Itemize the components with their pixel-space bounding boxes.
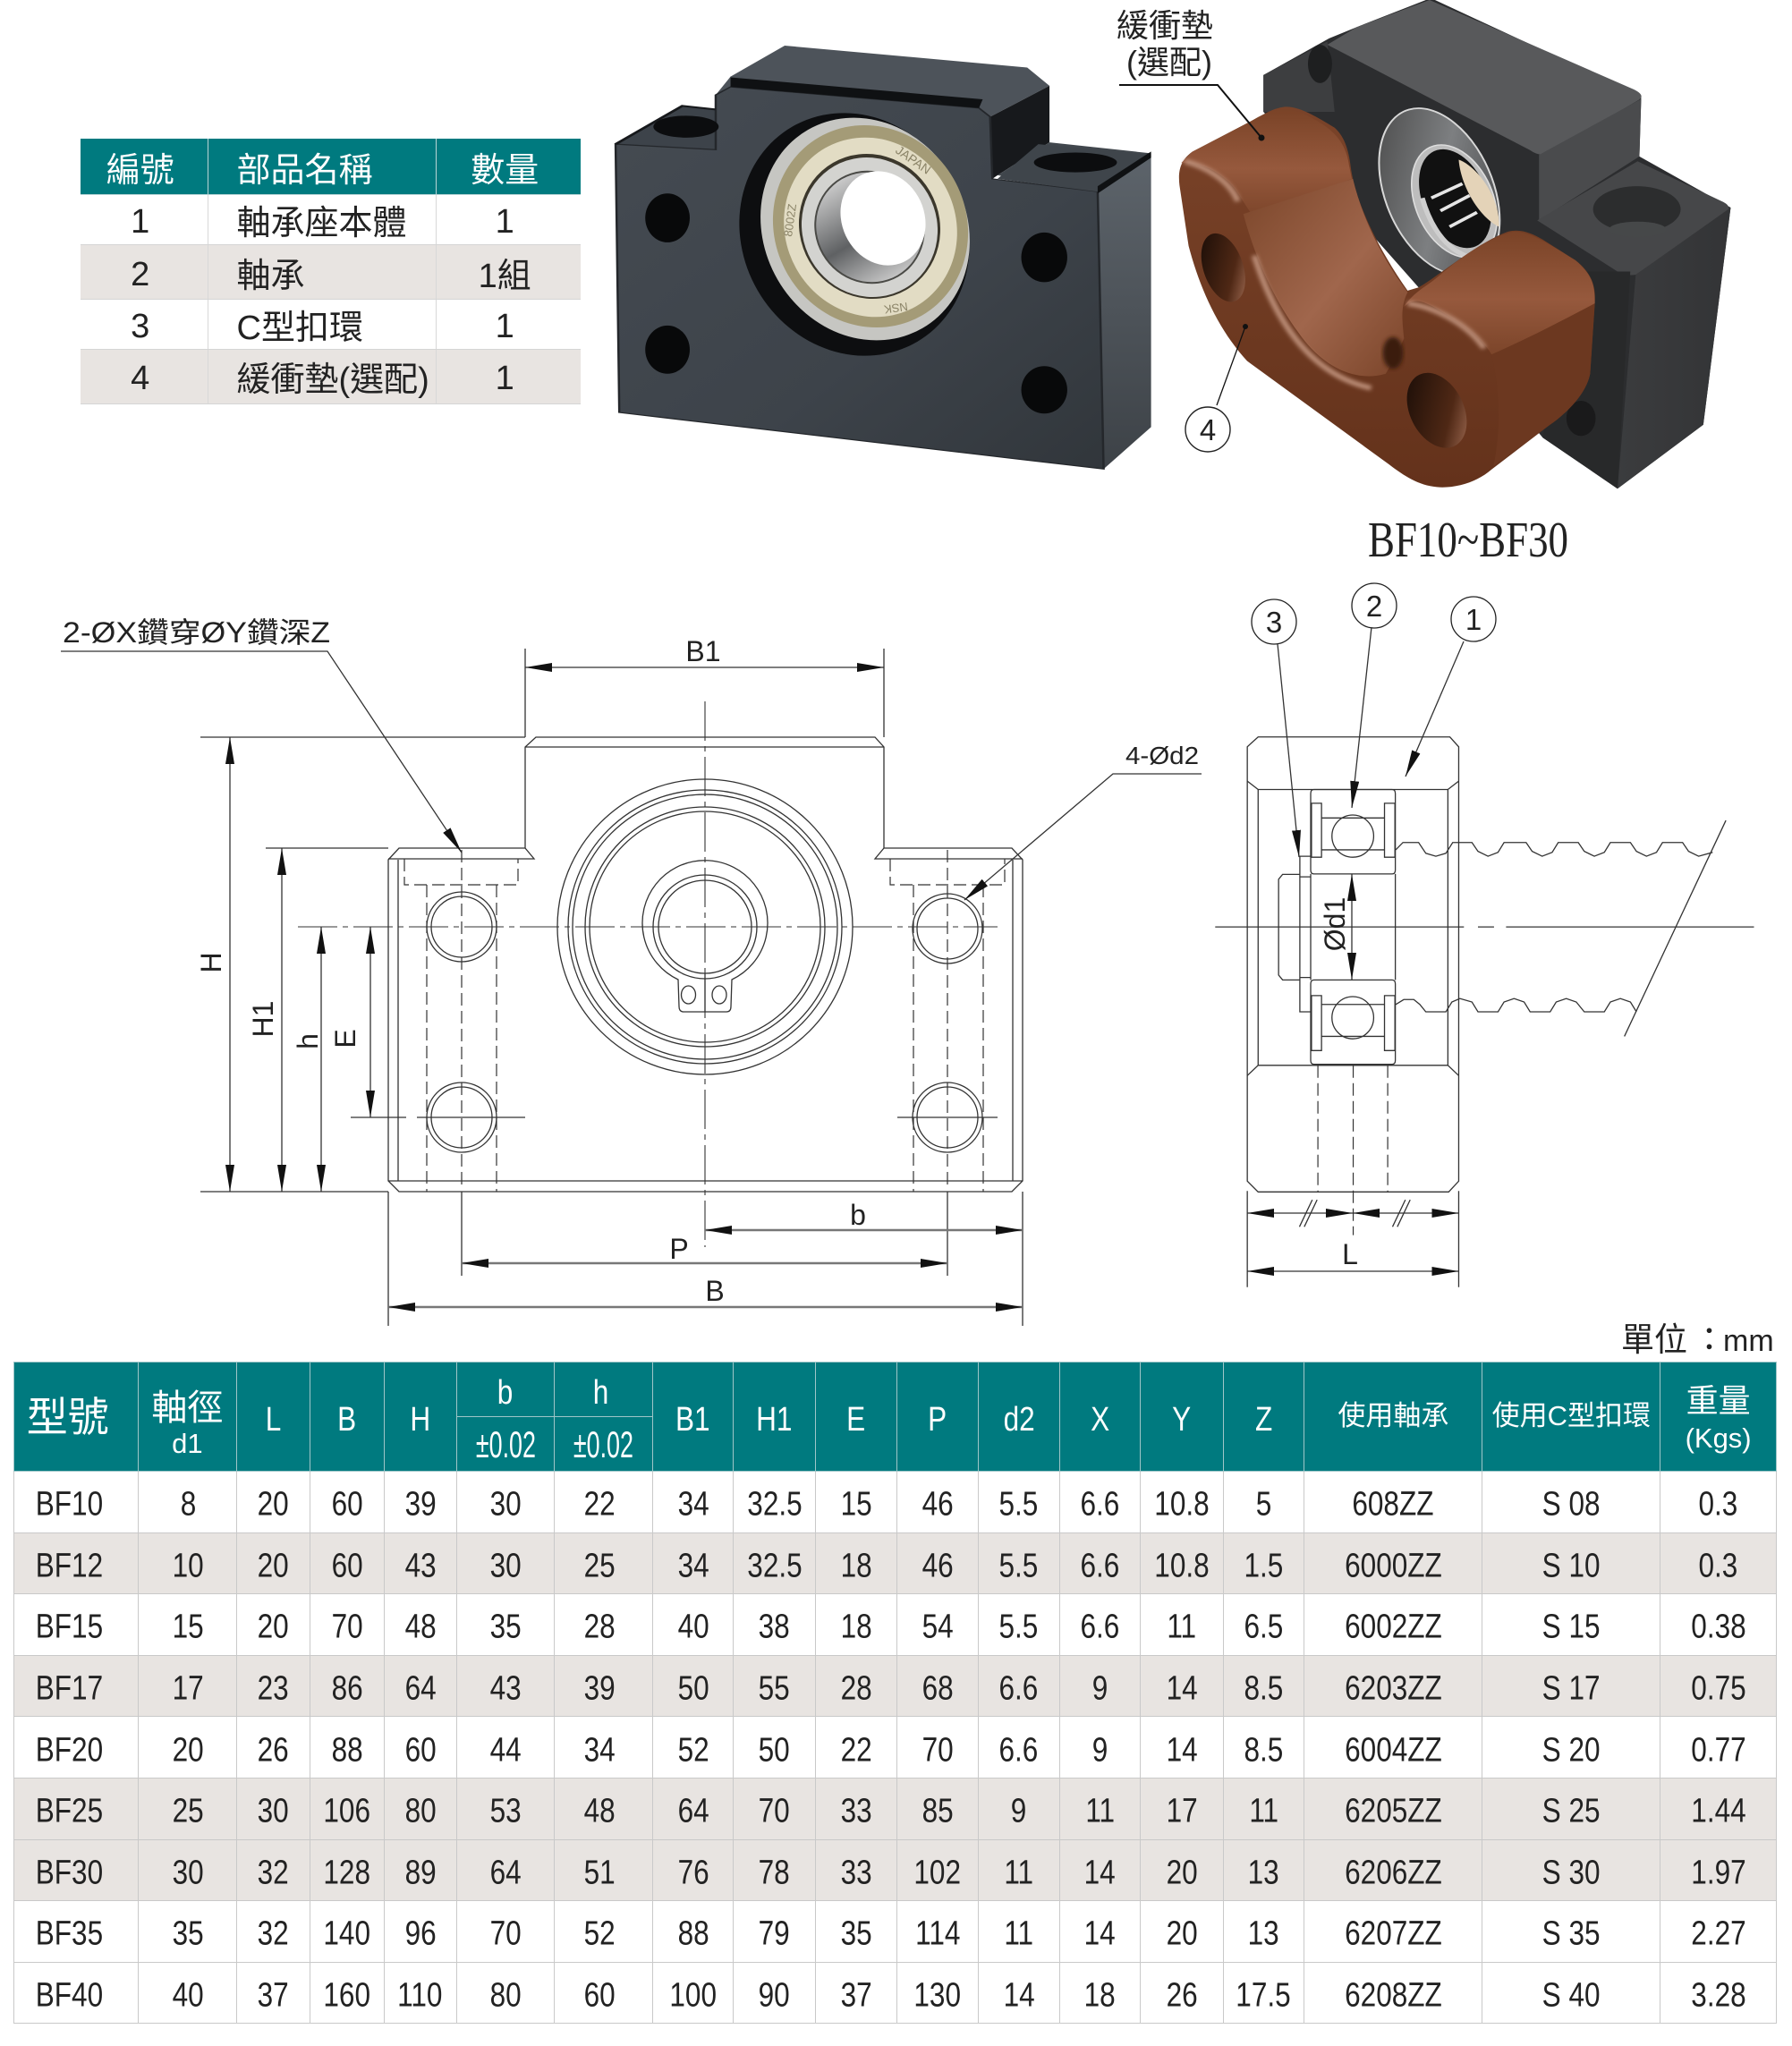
specification table: 34 [677,1486,709,1524]
specification table: E [846,1401,865,1439]
specification table: 54 [921,1609,953,1646]
parts list table: C型扣環 [236,310,363,347]
bearing [695,71,1014,398]
unit note: mm [1723,1324,1774,1358]
specification table: 30 [173,1854,204,1891]
specification table: 39 [404,1486,436,1524]
housing body [1263,0,1730,488]
specification table: 20 [258,1609,289,1646]
specification table: 51 [584,1854,616,1891]
specification table: 96 [404,1915,436,1953]
specification table: 40 [173,1977,204,2015]
technical drawing: side view [1215,737,1754,1287]
specification table: 10 [173,1547,204,1584]
specification table: 70 [331,1609,362,1646]
specification table: 0.75 [1691,1670,1745,1708]
specification table: 130 [914,1977,961,2015]
specification table: 14 [1003,1977,1034,2015]
specification table: 9 [1092,1731,1108,1769]
specification table: 使用軸承 [1338,1400,1448,1431]
specification table: 8.5 [1244,1731,1283,1769]
specification table: 20 [258,1547,289,1584]
leader label: counterbore holes: 2-ØX鑽穿ØY鑽深Z [63,616,330,649]
specification table: 106 [324,1793,370,1830]
specification table: Z [1255,1401,1272,1439]
specification table: (Kgs) [1686,1422,1752,1454]
specification table: 78 [759,1854,790,1891]
specification table: 6.6 [1081,1486,1119,1524]
specification table: 6002ZZ [1345,1609,1442,1646]
specification table: 35 [840,1915,871,1953]
specification table: 6.6 [999,1670,1039,1708]
specification table: 37 [258,1977,289,2015]
specification table: BF40 [36,1977,103,2015]
balloon: part 1: 1 [1465,603,1482,636]
specification table: 64 [677,1793,709,1830]
dimension lines: front view: P [669,1233,689,1265]
photo: housing with brown cushion pad [1179,0,1730,488]
specification table: BF15 [36,1609,103,1646]
leader label: mounting holes: 4-Ød2 [1125,742,1199,769]
specification table: 6004ZZ [1345,1731,1442,1769]
parts list table: 軸承座本體 [236,205,407,242]
specification table: 32.5 [747,1486,802,1524]
specification table: 0.77 [1691,1731,1745,1769]
parts list table: 部品名稱 [236,152,373,190]
specification table: 52 [584,1915,616,1953]
mounting holes [427,892,982,1152]
technical drawing: front view [298,701,1023,1247]
specification table: 3.28 [1691,1977,1745,2015]
specification table: 33 [840,1854,871,1891]
specification table: 30 [489,1486,522,1524]
specification table: 64 [404,1670,436,1708]
specification table: 0.3 [1699,1486,1738,1524]
specification table: 6.6 [1081,1547,1119,1584]
specification table: 2.27 [1691,1915,1745,1953]
specification table: H1 [756,1401,793,1439]
specification table: 8.5 [1244,1670,1283,1708]
specification table: 60 [331,1547,362,1584]
specification table: 8 [181,1486,196,1524]
specification table: 5.5 [999,1547,1039,1584]
specification table: 28 [584,1609,616,1646]
specification table: 40 [677,1609,709,1646]
dimension lines: side view [1247,874,1458,1271]
specification table: 11 [1085,1793,1115,1830]
parts list table: 1 [496,360,514,397]
specification table: 55 [759,1670,790,1708]
balloon: part 2: 2 [1366,590,1382,623]
leader label: counterbore holes [61,616,462,853]
specification table: 15 [173,1609,204,1646]
callout: part number 4: 4 [1200,413,1216,446]
specification table: 608ZZ [1353,1486,1434,1524]
specification table: 17.5 [1236,1977,1291,2015]
specification table: 11 [1004,1854,1033,1891]
specification table: S 25 [1542,1793,1601,1830]
specification table: S 08 [1542,1486,1601,1524]
specification table: 160 [324,1977,370,2015]
specification table: 6000ZZ [1345,1547,1442,1584]
specification table: 18 [840,1609,871,1646]
specification table: 32 [258,1854,289,1891]
dimension lines: front view: h [292,1033,324,1049]
specification table: 88 [331,1731,362,1769]
specification table: ±0.02 [573,1423,633,1465]
specification table: 6.5 [1244,1609,1283,1646]
specification table: 5.5 [999,1609,1039,1646]
ball screw shaft [1396,820,1726,1036]
specification table: Y [1172,1401,1192,1439]
dimension lines: side view: L [1342,1238,1358,1270]
specification table: 6206ZZ [1345,1854,1442,1891]
specification table: 60 [584,1977,616,2015]
specification table: H [410,1401,430,1439]
parts list table: 4 [131,360,149,397]
specification table: 5.5 [999,1486,1039,1524]
specification table: 10.8 [1154,1547,1210,1584]
specification table: 型號 [27,1394,109,1440]
specification table: 15 [840,1486,871,1524]
specification table: 79 [759,1915,790,1953]
balloon: part 3: 3 [1266,606,1282,639]
parts list table: 1組 [479,258,531,295]
specification table: L [266,1401,281,1439]
specification table: 89 [404,1854,436,1891]
callout: cushion pad (optional): (選配) [1126,44,1212,81]
specification table: X [1091,1401,1109,1439]
specification table: 26 [1166,1977,1198,2015]
specification table: 35 [489,1609,522,1646]
specification table: 20 [258,1486,289,1524]
parts list table: 緩衝墊(選配) [236,361,429,399]
dimension lines: front view: B [705,1275,725,1307]
parts list table: 1 [496,203,514,241]
dimension lines: front view: b [850,1199,866,1231]
specification table: BF12 [36,1547,103,1584]
unit note: 單位 [1621,1321,1687,1358]
specification table: 6203ZZ [1345,1670,1442,1708]
specification table: S 20 [1542,1731,1601,1769]
specification table: 80 [404,1793,436,1830]
specification table: 46 [921,1547,953,1584]
cushion pad [1179,106,1595,488]
callout: cushion pad (optional) [1117,7,1265,141]
specification table: 128 [324,1854,370,1891]
parts list table: 軸承 [236,258,305,295]
specification table: 32.5 [747,1547,802,1584]
leader label: mounting holes [964,742,1202,900]
specification table: 25 [584,1547,616,1584]
specification table: S 30 [1542,1854,1601,1891]
specification table: 11 [1168,1609,1196,1646]
specification table: 17 [1166,1793,1198,1830]
specification table: 70 [759,1793,790,1830]
parts list table: 2 [131,256,149,293]
specification table: 68 [921,1670,953,1708]
specification table: 110 [398,1977,443,2015]
specification table: 1.44 [1691,1793,1745,1830]
specification table: 10.8 [1154,1486,1210,1524]
specification table: 1.97 [1691,1854,1745,1891]
specification table: b [497,1374,514,1412]
specification table: h [593,1374,609,1412]
specification table: 32 [258,1915,289,1953]
parts list table: 數量 [471,152,539,190]
specification table: 60 [404,1731,436,1769]
specification table: 80 [489,1977,522,2015]
unit note: ： [1693,1321,1726,1358]
specification table: 22 [840,1731,871,1769]
specification table: 6207ZZ [1345,1915,1442,1953]
specification table: 9 [1092,1670,1108,1708]
specification table: 114 [915,1915,960,1953]
specification table: 85 [921,1793,953,1830]
specification table: 14 [1084,1915,1116,1953]
specification table: S 15 [1542,1609,1601,1646]
specification table: 6.6 [999,1731,1039,1769]
specification table: 25 [173,1793,204,1830]
dimension lines: front view: B1 [685,635,721,667]
specification table: 140 [324,1915,370,1953]
specification table: 20 [1166,1854,1198,1891]
specification table: 18 [1084,1977,1116,2015]
specification table: 9 [1011,1793,1026,1830]
specification table: 22 [584,1486,616,1524]
specification table: B1 [675,1401,710,1439]
specification table: 0.38 [1691,1609,1745,1646]
specification table: 重量 [1686,1382,1751,1419]
specification table: BF17 [36,1670,103,1708]
specification table: 60 [331,1486,362,1524]
specification table: 14 [1084,1854,1116,1891]
specification table: 11 [1249,1793,1278,1830]
specification table: 軸徑 [151,1388,223,1428]
parts list table: 3 [131,308,149,345]
specification table: 6208ZZ [1345,1977,1442,2015]
specification table: 43 [489,1670,522,1708]
callout: part number 4 [1185,324,1248,452]
specification table: BF25 [36,1793,103,1830]
specification table: BF10 [36,1486,103,1524]
specification table: 30 [258,1793,289,1830]
specification table: 6.6 [1081,1609,1119,1646]
specification table: BF35 [36,1915,103,1953]
specification table: 38 [759,1609,790,1646]
photo: black bearing housing [616,46,1151,469]
specification table: 14 [1166,1670,1198,1708]
specification table: 28 [840,1670,871,1708]
specification table: 53 [489,1793,522,1830]
bearings [1311,789,1396,1065]
balloon: part 1 [1406,597,1496,777]
specification table: 100 [669,1977,717,2015]
specification table: 13 [1248,1854,1279,1891]
specification table: 35 [173,1915,204,1953]
specification table: 5 [1256,1486,1271,1524]
model range caption: BF10~BF30 [1368,513,1568,568]
specification table: 64 [489,1854,522,1891]
specification table: 17 [173,1670,204,1708]
specification table: 6205ZZ [1345,1793,1442,1830]
specification table: S 40 [1542,1977,1601,2015]
specification table: 34 [677,1547,709,1584]
specification table: 50 [759,1731,790,1769]
specification table: 14 [1166,1731,1198,1769]
balloon: part 2 [1352,583,1397,808]
specification table: 11 [1004,1915,1033,1953]
specification table: 39 [584,1670,616,1708]
balloon: part 3 [1252,599,1299,857]
specification table: 50 [677,1670,709,1708]
specification table: 1.5 [1244,1547,1283,1584]
specification table: 0.3 [1699,1547,1738,1584]
specification table: S 35 [1542,1915,1601,1953]
dimension lines: front view [195,635,1023,1326]
specification table: BF20 [36,1731,103,1769]
specification table: 26 [258,1731,289,1769]
specification table: S 17 [1542,1670,1601,1708]
dimension lines: front view: E [329,1029,361,1048]
specification table: 48 [584,1793,616,1830]
specification table: 43 [404,1547,436,1584]
specification table: 86 [331,1670,362,1708]
dimension lines: front view: H [195,952,227,973]
specification table: d1 [172,1428,203,1459]
specification table: 30 [489,1547,522,1584]
specification table: 88 [677,1915,709,1953]
specification table: BF30 [36,1854,103,1891]
specification table [13,1362,1777,2024]
parts list table [81,139,581,404]
specification table: 70 [489,1915,522,1953]
specification table: 52 [677,1731,709,1769]
specification table: P [928,1401,947,1439]
dimension lines: front view: H1 [247,1001,279,1037]
bearing: NSK [883,300,909,317]
specification table: 48 [404,1609,436,1646]
specification table: 46 [921,1486,953,1524]
parts list table: 1 [496,308,514,345]
specification table: 23 [258,1670,289,1708]
specification table: 70 [921,1731,953,1769]
specification table: 76 [677,1854,709,1891]
parts list table: 編號 [106,152,174,190]
snap ring [642,861,768,1012]
specification table: 90 [759,1977,790,2015]
bearing bore [1357,95,1522,288]
specification table: 33 [840,1793,871,1830]
specification table: B [337,1401,356,1439]
specification table: 37 [840,1977,871,2015]
specification table: ±0.02 [475,1423,535,1465]
specification table: 44 [489,1731,522,1769]
specification table: 102 [914,1854,961,1891]
dimension lines: side view: Ød1 [1319,897,1351,951]
specification table: 20 [1166,1915,1198,1953]
specification table: 13 [1248,1915,1279,1953]
specification table: 18 [840,1547,871,1584]
parts list table: 1 [131,203,149,241]
specification table: S 10 [1542,1547,1601,1584]
specification table: 使用C型扣環 [1492,1400,1651,1431]
specification table: 20 [173,1731,204,1769]
callout: cushion pad (optional): 緩衝墊 [1117,7,1213,44]
specification table: 34 [584,1731,616,1769]
specification table: d2 [1003,1401,1034,1439]
bearing: 8002Z [781,203,799,237]
bearing: JAPAN [893,142,934,177]
